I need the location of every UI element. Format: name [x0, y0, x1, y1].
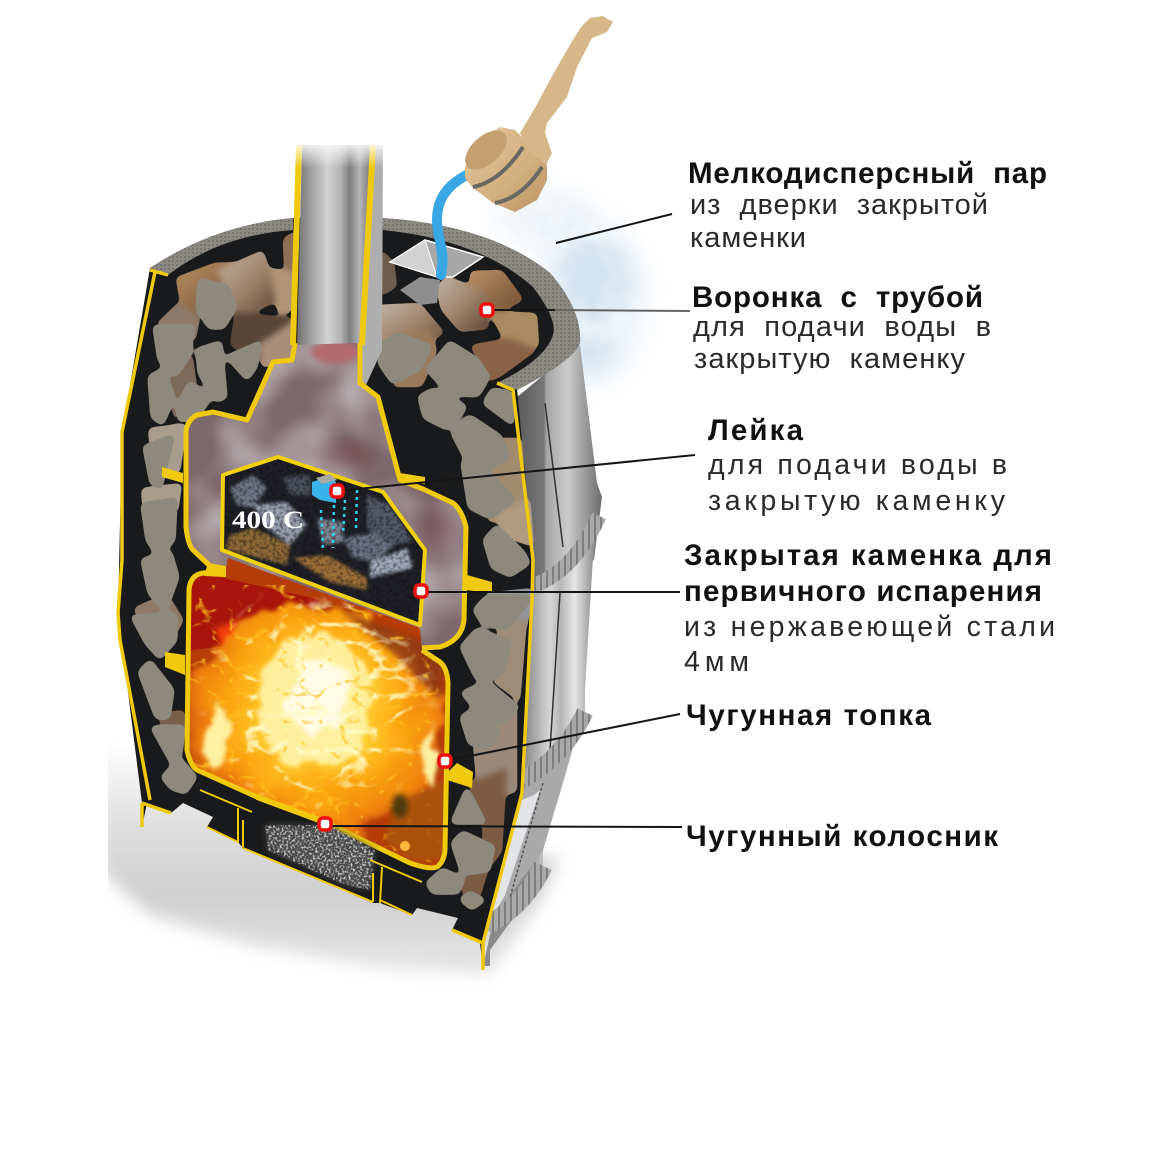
label: closed heater: Закрытая каменка для	[684, 539, 1052, 572]
stones pile: natural back stones	[133, 230, 539, 907]
label: closed heater: из нержавеющей стали	[684, 611, 1055, 643]
ladle hoops	[473, 147, 542, 203]
label: closed heater	[684, 539, 1055, 678]
yellow flanges	[162, 467, 492, 788]
label: cast-iron grate: Чугунный колосник	[686, 820, 998, 853]
label: cast-iron firebox: Чугунная топка	[686, 699, 932, 732]
wooden ladle	[437, 16, 613, 275]
barrel band upper	[533, 516, 599, 586]
ash pit and cast-iron grate	[200, 790, 422, 915]
icon: water cube	[312, 474, 337, 503]
barrel band lower	[486, 866, 543, 926]
label: fine steam: Мелкодисперсный пар	[688, 157, 1047, 190]
label: watering can: Лейка	[708, 414, 804, 447]
leader lines	[325, 214, 695, 827]
ladle handle	[520, 16, 613, 165]
label: funnel with pipe	[692, 281, 991, 375]
label: closed heater: 4мм	[684, 646, 749, 678]
callout markers	[319, 304, 493, 830]
stones pile: flat cut stones	[133, 280, 530, 908]
stove cross-section body	[118, 218, 580, 970]
label: watering can: закрытую каменку	[708, 485, 1006, 517]
label: fine steam: каменки	[690, 222, 806, 254]
label: fine steam: из дверки закрытой	[690, 189, 988, 221]
flue chimney pipe	[290, 140, 390, 385]
top rim ring	[150, 218, 580, 390]
label: funnel with pipe: Воронка с трубой	[692, 281, 983, 314]
steam cloud	[499, 180, 650, 390]
label: watering can	[708, 414, 1007, 517]
yellow firebox walls	[186, 343, 466, 868]
label: funnel with pipe: закрытую каменку	[694, 343, 966, 375]
label: watering can: для подачи воды в	[708, 449, 1007, 481]
stove exterior barrel	[483, 345, 602, 966]
water stream	[437, 172, 473, 275]
yellow outer shell	[118, 270, 533, 970]
floor shadow	[95, 745, 560, 975]
upper gas chamber	[188, 343, 464, 650]
label: funnel with pipe: для подачи воды в	[693, 311, 991, 343]
label: fine steam	[688, 157, 1047, 254]
barrel band middle	[523, 712, 585, 780]
closed heater with coals	[215, 450, 430, 630]
water drip dots	[321, 490, 357, 551]
fire in firebox	[182, 555, 450, 875]
label: closed heater: первичного испарения	[684, 575, 1042, 608]
funnel with pipe	[390, 240, 483, 305]
temperature label: 400 C	[232, 507, 304, 534]
ladle bucket	[465, 127, 547, 212]
